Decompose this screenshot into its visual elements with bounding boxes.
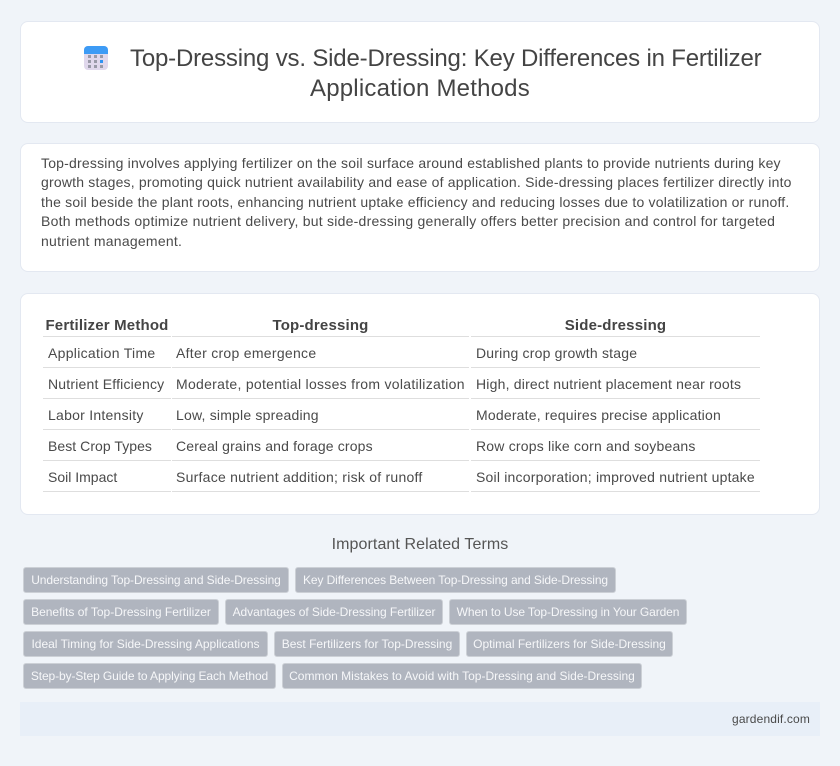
row: soil impact: Soil Impact	[48, 469, 117, 485]
tag	[282, 663, 642, 689]
row: soil impact: Surface nutrient addition; risk of runoff	[176, 469, 423, 485]
tag	[449, 599, 687, 625]
row: best crop types: Row crops like corn and soybeans	[476, 438, 696, 454]
tag	[466, 631, 673, 657]
title: Top-Dressing vs. Side-Dressing: Key Differences in Fertilizer	[130, 45, 761, 72]
intro card	[20, 143, 820, 272]
intro paragraph: growth stages, promoting quick nutrient availability and ease of application. Side-dressing places fertilizer directly into	[41, 174, 792, 190]
tag: Common Mistakes to Avoid with Top-Dressing and Side-Dressing	[289, 669, 635, 683]
row: labor intensity: Moderate, requires precise application	[476, 407, 721, 423]
related terms heading: Important Related Terms	[332, 536, 508, 553]
tag: Ideal Timing for Side-Dressing Applications	[31, 637, 260, 651]
intro paragraph: the soil beside the plant roots, enhancing nutrient uptake efficiency and reducing losses due to volatilization or runoff.	[41, 194, 789, 210]
intro paragraph	[41, 155, 792, 249]
tag: Best Fertilizers for Top-Dressing	[282, 637, 452, 651]
row: best crop types	[48, 438, 696, 454]
footer bar	[20, 702, 820, 736]
related terms tags	[23, 567, 687, 689]
row: nutrient efficiency: Moderate, potential losses from volatilization	[176, 376, 465, 392]
table header: Top-dressing	[272, 317, 369, 334]
tag	[23, 631, 268, 657]
footer source: gardendif.com	[732, 712, 810, 726]
intro paragraph: nutrient management.	[41, 233, 182, 249]
row: nutrient efficiency: High, direct nutrient placement near roots	[476, 376, 741, 392]
header card	[20, 21, 820, 123]
row: application time	[48, 345, 637, 361]
row: application time: During crop growth stage	[476, 345, 637, 361]
row: soil impact: Soil incorporation; improved nutrient uptake	[476, 469, 755, 485]
tag: Benefits of Top-Dressing Fertilizer	[31, 605, 211, 619]
tag	[23, 567, 289, 593]
tag	[274, 631, 460, 657]
tag: Advantages of Side-Dressing Fertilizer	[233, 605, 435, 619]
title	[130, 45, 762, 102]
intro paragraph: Both methods optimize nutrient delivery, but side-dressing generally offers better precision and control for targeted	[41, 213, 775, 229]
table header: Fertilizer Method	[45, 317, 169, 334]
tag: Step-by-Step Guide to Applying Each Method	[31, 669, 268, 683]
icon: calendar	[84, 46, 108, 70]
row: application time: Application Time	[48, 345, 156, 361]
table header	[45, 317, 666, 334]
tag	[225, 599, 443, 625]
table header: Side-dressing	[565, 317, 666, 334]
tag	[23, 599, 219, 625]
intro paragraph: Top-dressing involves applying fertilizer on the soil surface around established plants to provide nutrients during key	[41, 155, 781, 171]
tag	[295, 567, 616, 593]
row: best crop types: Cereal grains and forage crops	[176, 438, 373, 454]
row: labor intensity: Labor Intensity	[48, 407, 144, 423]
row: soil impact	[48, 469, 755, 485]
tag: Understanding Top-Dressing and Side-Dressing	[31, 573, 281, 587]
table card	[20, 293, 820, 515]
row: labor intensity: Low, simple spreading	[176, 407, 319, 423]
row: nutrient efficiency	[48, 376, 741, 392]
row: best crop types: Best Crop Types	[48, 438, 152, 454]
tag	[23, 663, 276, 689]
title: Application Methods	[310, 75, 530, 102]
row: application time: After crop emergence	[176, 345, 316, 361]
tag: When to Use Top-Dressing in Your Garden	[457, 605, 679, 619]
tag: Key Differences Between Top-Dressing and Side-Dressing	[303, 573, 608, 587]
comparison table	[43, 317, 760, 492]
row: labor intensity	[48, 407, 721, 423]
row: nutrient efficiency: Nutrient Efficiency	[48, 376, 164, 392]
tag: Optimal Fertilizers for Side-Dressing	[473, 637, 666, 651]
